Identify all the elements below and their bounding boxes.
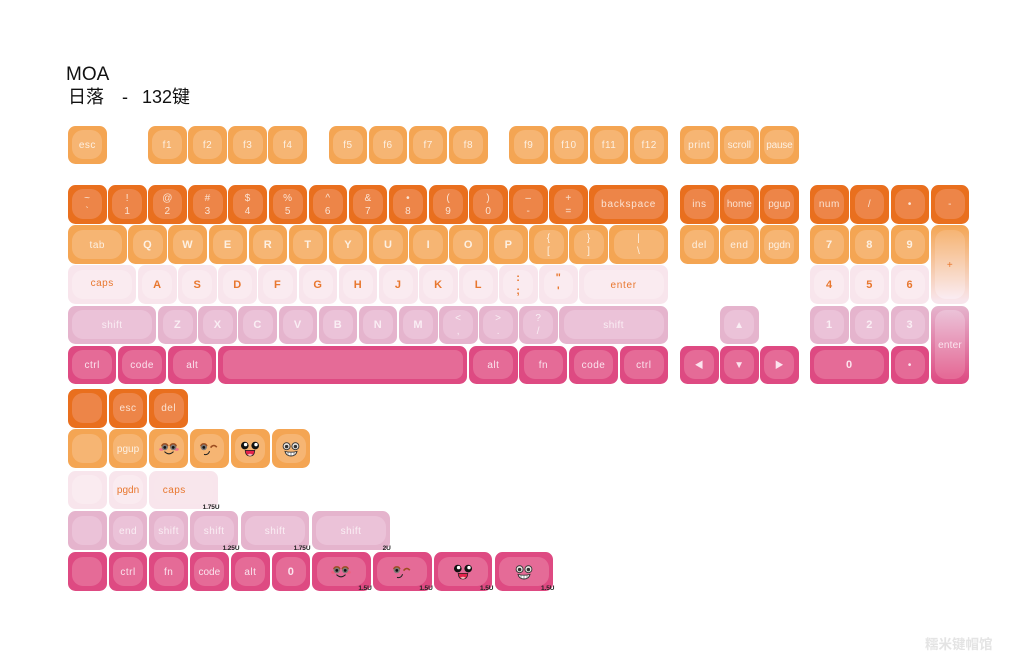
key: shift 1U xyxy=(149,511,188,550)
key: C: C xyxy=(253,319,262,331)
key: O xyxy=(449,225,488,264)
key: B xyxy=(319,306,357,344)
key: f11 xyxy=(590,126,628,164)
key: 0: 0 xyxy=(485,206,491,217)
key: alt alternate: alt xyxy=(244,567,256,578)
key: 9: 9 xyxy=(445,206,451,217)
key: code alternate xyxy=(190,552,229,591)
title xyxy=(66,64,190,107)
key: open mouth face 1.5U xyxy=(434,552,492,591)
key: equals: = xyxy=(565,206,572,217)
title: product name: MOA xyxy=(66,64,109,85)
key: arrow right: ▶ xyxy=(775,360,784,370)
key: shift 1.25U xyxy=(190,511,238,550)
key: minus: - xyxy=(527,206,530,217)
key: f10 xyxy=(550,126,588,164)
key: left alt xyxy=(168,346,216,384)
key: W xyxy=(168,225,207,264)
key: scroll xyxy=(720,126,759,164)
key: f9: f9 xyxy=(524,140,533,151)
size label: 1.5U: 1.5U xyxy=(358,585,372,592)
key: semicolon: ; xyxy=(516,285,520,297)
key: pause: pause xyxy=(766,140,792,151)
key: period xyxy=(479,306,518,344)
key: pad 3 xyxy=(890,306,929,344)
key: f2: f2 xyxy=(203,140,212,151)
key: f1 xyxy=(148,126,187,164)
key: L: L xyxy=(475,279,482,291)
key: pad 4 xyxy=(810,265,849,304)
key: f5 xyxy=(328,126,367,164)
key: num: num xyxy=(819,199,840,210)
key: pad 5: 5 xyxy=(866,279,873,291)
key: arrow down: ▼ xyxy=(734,360,745,371)
key: 5: % xyxy=(283,193,293,204)
main block: caps row xyxy=(68,265,668,304)
key: caps 1.75U xyxy=(149,471,218,509)
key: ins: ins xyxy=(692,199,706,210)
key: M xyxy=(399,306,438,344)
key: f4 xyxy=(268,126,307,164)
key: period: . xyxy=(497,326,500,337)
key: 1: 1 xyxy=(124,206,130,217)
key: del alternate xyxy=(149,389,188,428)
key: backspace xyxy=(589,185,668,224)
main block: shift row xyxy=(68,306,668,344)
key: B: B xyxy=(334,319,342,331)
key: 3: # xyxy=(205,193,211,204)
key: esc alternate xyxy=(109,389,147,428)
key: left bracket: { xyxy=(547,233,551,244)
key: pad 7: 7 xyxy=(826,239,833,251)
key: Y: Y xyxy=(344,239,352,251)
key: X: X xyxy=(214,319,222,331)
key: blank mauve xyxy=(68,511,107,550)
key: equals: + xyxy=(565,193,572,204)
key: left bracket: [ xyxy=(547,246,550,257)
key: backslash xyxy=(609,225,668,264)
key: f9 xyxy=(509,126,548,164)
key: 3: 3 xyxy=(205,206,211,217)
key: blank light pink xyxy=(68,471,107,509)
extras: light pink row xyxy=(68,471,220,511)
key: shift 2U xyxy=(312,511,390,550)
key: right alt xyxy=(469,346,518,384)
watermark: 糯米键帽馆 xyxy=(925,637,992,652)
key: right bracket: ] xyxy=(587,246,590,257)
key: D xyxy=(218,265,257,304)
key: right bracket: } xyxy=(587,233,591,244)
key: P: P xyxy=(505,239,512,251)
key: subtract: - xyxy=(948,199,952,210)
title: colourway and key count: 132键 xyxy=(142,87,190,107)
key: f6: f6 xyxy=(383,140,393,151)
key: del: del xyxy=(692,240,707,251)
key: pad 9: 9 xyxy=(907,239,913,251)
key: right code: code xyxy=(582,360,605,371)
key: quote: ' xyxy=(557,285,560,297)
key: alt alternate xyxy=(231,552,270,591)
key: f12: f12 xyxy=(641,140,657,151)
key: f8: f8 xyxy=(464,140,473,151)
key: T xyxy=(289,225,327,264)
key: Z xyxy=(158,306,197,344)
navigation cluster xyxy=(680,185,799,384)
extras: mauve row xyxy=(68,511,391,552)
key: ctrl alternate: ctrl xyxy=(120,567,136,578)
key: code alternate: code xyxy=(198,567,220,578)
key: A: A xyxy=(153,279,162,291)
key: esc alternate: esc xyxy=(120,403,137,414)
key: blank dark orange xyxy=(68,389,107,428)
key: smiling face 1.5U xyxy=(312,552,371,591)
main block: number row xyxy=(68,185,668,224)
key: caps: caps xyxy=(91,278,114,289)
key: E xyxy=(208,225,247,264)
key: f12 xyxy=(630,126,668,164)
key: subtract xyxy=(931,185,969,224)
key: 5 xyxy=(268,185,307,224)
key: 6: 6 xyxy=(325,206,331,217)
key: 7: & xyxy=(364,193,372,204)
key: semicolon: : xyxy=(516,272,520,284)
key: 8: • xyxy=(406,193,410,204)
key: del xyxy=(680,225,719,264)
key: 0 alternate xyxy=(272,552,310,591)
key: fn xyxy=(519,346,567,384)
extras: orange row with faces xyxy=(68,429,310,468)
main block: tab row xyxy=(68,225,668,264)
key: fn alternate xyxy=(149,552,188,591)
key: pad 6: 6 xyxy=(907,279,913,291)
key: 0 xyxy=(469,185,508,224)
key: H xyxy=(339,265,377,304)
key: f4: f4 xyxy=(283,140,292,151)
key: N: N xyxy=(374,319,382,331)
key: K: K xyxy=(434,279,443,291)
key: tilde: ~ xyxy=(84,193,91,204)
key: pad dot: • xyxy=(908,360,912,371)
key: slash: / xyxy=(537,326,540,337)
key: 9 xyxy=(429,185,468,224)
main block: bottom row xyxy=(68,346,668,384)
key: 4: $ xyxy=(245,193,251,204)
key: pad 1 xyxy=(810,306,849,344)
key: pgdn: pgdn xyxy=(768,240,790,251)
key: f7 xyxy=(409,126,447,164)
key: H: H xyxy=(354,279,362,291)
key: ins xyxy=(680,185,719,224)
key: f10: f10 xyxy=(561,140,577,151)
key: 6 xyxy=(309,185,347,224)
key: A xyxy=(138,265,177,304)
key: left alt: alt xyxy=(186,360,198,371)
key: enter xyxy=(579,265,668,304)
key: f3: f3 xyxy=(243,140,252,151)
key: caps xyxy=(68,265,136,304)
key: home: home xyxy=(727,199,752,210)
key: f7: f7 xyxy=(423,140,433,151)
key: pad 2: 2 xyxy=(866,319,873,331)
key: pad 5 xyxy=(850,265,889,304)
key: esc xyxy=(68,126,107,164)
extras: pink row with wide faces xyxy=(68,552,554,592)
key: pad enter: enter xyxy=(938,340,962,351)
key: arrow down xyxy=(720,346,759,384)
key: Q xyxy=(128,225,167,264)
key: 1: ! xyxy=(126,193,129,204)
key: F xyxy=(258,265,297,304)
key: num xyxy=(810,185,849,224)
key: R xyxy=(249,225,287,264)
key: semicolon xyxy=(499,265,538,304)
key: minus: – xyxy=(525,193,531,204)
key: D: D xyxy=(233,279,242,291)
key: X xyxy=(198,306,237,344)
key: C xyxy=(238,306,277,344)
key: enter: enter xyxy=(610,280,637,291)
key: quote: " xyxy=(556,272,561,284)
key: pad 0: 0 xyxy=(846,359,853,371)
key: scroll: scroll xyxy=(728,140,751,151)
key: toothy grin face 1.5U xyxy=(495,552,553,591)
key: slash: ? xyxy=(535,313,541,324)
key: left shift: shift xyxy=(102,320,123,331)
key: right bracket xyxy=(569,225,608,264)
key: 2 xyxy=(148,185,187,224)
key: ctrl alternate xyxy=(109,552,147,591)
key: left ctrl: ctrl xyxy=(84,360,100,371)
key: winking face xyxy=(190,429,229,468)
key: V xyxy=(278,306,317,344)
key: open mouth face xyxy=(231,429,270,468)
key: pgup alternate: pgup xyxy=(117,444,139,455)
key: 0 alternate: 0 xyxy=(288,566,294,578)
key: f11: f11 xyxy=(602,140,616,151)
key: W: W xyxy=(182,239,193,251)
key: left shift xyxy=(68,306,156,344)
key: shift 1U: shift xyxy=(158,526,179,537)
key: pad 8 xyxy=(850,225,889,264)
key: home xyxy=(720,185,759,224)
key: print xyxy=(680,126,718,164)
key: comma: , xyxy=(457,326,460,337)
key: right ctrl: ctrl xyxy=(636,360,652,371)
key: fn alternate: fn xyxy=(164,567,173,578)
key: 1 xyxy=(108,185,147,224)
key: V: V xyxy=(294,319,302,331)
key: pad 3: 3 xyxy=(907,319,913,331)
size label: 1.75U: 1.75U xyxy=(203,504,219,511)
key: multiply xyxy=(890,185,929,224)
key: 5: 5 xyxy=(285,206,291,217)
key: U xyxy=(369,225,408,264)
key: quote xyxy=(539,265,578,304)
key: G xyxy=(298,265,337,304)
key: 4 xyxy=(228,185,267,224)
key: f8 xyxy=(449,126,488,164)
key: end alternate xyxy=(109,511,147,550)
key: divide xyxy=(850,185,889,224)
key: f3 xyxy=(228,126,267,164)
title: colourway and key count xyxy=(68,87,190,107)
key: arrow up: ▲ xyxy=(734,320,745,331)
key: P xyxy=(489,225,528,264)
size label: 1.5U: 1.5U xyxy=(480,585,493,592)
size label: 1.75U: 1.75U xyxy=(294,545,310,552)
key: caps 1.75U: caps xyxy=(163,485,186,496)
key: L xyxy=(459,265,498,304)
key: I: I xyxy=(427,239,430,251)
key: arrow left xyxy=(680,346,719,384)
key: f6 xyxy=(369,126,407,164)
key: Z: Z xyxy=(174,319,181,331)
title: colourway and key count: 日落 xyxy=(68,87,104,107)
key: right shift: shift xyxy=(603,320,624,331)
function row xyxy=(68,126,799,164)
key: pgdn xyxy=(760,225,799,264)
key: K xyxy=(419,265,458,304)
key: shift 1.75U xyxy=(241,511,309,550)
key: pad 8: 8 xyxy=(866,239,873,251)
key: I xyxy=(409,225,448,264)
key: R: R xyxy=(264,239,272,251)
key: 8 xyxy=(389,185,427,224)
key: spacebar xyxy=(218,346,467,384)
key: pad 1: 1 xyxy=(826,319,833,331)
key: F: F xyxy=(274,279,281,291)
key: right shift xyxy=(559,306,668,344)
key: pgdn alternate: pgdn xyxy=(117,485,139,496)
key: pad 0 xyxy=(810,346,889,384)
key: U: U xyxy=(384,239,392,251)
key: comma: < xyxy=(455,313,462,324)
key: T: T xyxy=(304,239,312,251)
key: slash xyxy=(519,306,558,344)
key: blank pink xyxy=(68,552,107,591)
key: comma xyxy=(439,306,478,344)
key: 2: 2 xyxy=(164,206,171,217)
key: tab: tab xyxy=(90,240,105,251)
key: toothy grin face xyxy=(272,429,310,468)
key: 7 xyxy=(349,185,387,224)
size label: 1.5U: 1.5U xyxy=(419,585,433,592)
key: 0: ) xyxy=(486,193,490,204)
key: Y xyxy=(329,225,367,264)
key: O: O xyxy=(464,239,473,251)
key: print: print xyxy=(688,140,710,151)
key: arrow left: ◀ xyxy=(695,360,704,370)
size label: 2U: 2U xyxy=(383,545,391,552)
key: blank orange xyxy=(68,429,107,468)
key: pad enter xyxy=(931,306,969,384)
key: backslash: \ xyxy=(637,246,640,257)
key: backslash: | xyxy=(637,233,640,244)
key: 7: 7 xyxy=(365,206,371,217)
key: period: > xyxy=(495,313,502,324)
key: pgup: pgup xyxy=(768,199,790,210)
key: left ctrl xyxy=(68,346,116,384)
key: N xyxy=(359,306,397,344)
key: pgdn alternate xyxy=(109,471,147,509)
key: left code: code xyxy=(130,360,154,371)
key: smiling face xyxy=(149,429,188,468)
key: esc: esc xyxy=(79,140,96,151)
key: f5: f5 xyxy=(343,140,353,151)
key: equals xyxy=(549,185,588,224)
key: end: end xyxy=(730,240,748,251)
key: left bracket xyxy=(529,225,568,264)
key: Q: Q xyxy=(143,239,152,251)
key: del alternate: del xyxy=(161,403,176,414)
key: pgup xyxy=(760,185,799,224)
key: pad plus xyxy=(931,225,969,304)
key: winking face 1.5U xyxy=(373,552,432,591)
key: divide: / xyxy=(868,199,871,210)
key: multiply: • xyxy=(908,199,912,210)
key: pad 2 xyxy=(850,306,889,344)
key: S: S xyxy=(194,279,201,291)
key: pad 9 xyxy=(890,225,929,264)
key: pad 7 xyxy=(810,225,849,264)
key: tilde xyxy=(68,185,107,224)
key: arrow up xyxy=(720,306,759,344)
key: 4: 4 xyxy=(245,206,251,217)
size label: 1.5U: 1.5U xyxy=(541,585,554,592)
key: pgup alternate xyxy=(109,429,147,468)
size label: 1.25U: 1.25U xyxy=(223,545,239,552)
key: end alternate: end xyxy=(119,526,137,537)
key: arrow right xyxy=(760,346,799,384)
extras: dark orange row xyxy=(68,389,188,428)
key: S xyxy=(178,265,217,304)
key: left code xyxy=(118,346,166,384)
key: end xyxy=(720,225,759,264)
key: tilde: ` xyxy=(85,206,89,217)
key: 8: 8 xyxy=(405,206,411,217)
title: colourway and key count: - xyxy=(122,87,128,107)
key: M: M xyxy=(413,319,423,331)
key: 3 xyxy=(188,185,227,224)
key: shift 1.75U: shift xyxy=(265,526,286,537)
key: fn: fn xyxy=(539,360,548,371)
key: right code xyxy=(569,346,618,384)
key: pause xyxy=(760,126,799,164)
key: J: J xyxy=(395,279,402,291)
key: minus xyxy=(509,185,548,224)
key: pad dot xyxy=(890,346,929,384)
key: right ctrl xyxy=(620,346,668,384)
key: f2 xyxy=(188,126,227,164)
key: tab xyxy=(68,225,126,264)
key: 9: ( xyxy=(446,193,450,204)
key: G: G xyxy=(313,279,322,291)
key: backspace: backspace xyxy=(601,199,656,210)
key: pad 6 xyxy=(890,265,929,304)
key: shift 2U: shift xyxy=(341,526,361,537)
key: 2: @ xyxy=(162,193,173,204)
key: J xyxy=(379,265,418,304)
numeric keypad xyxy=(810,185,969,384)
key: f1: f1 xyxy=(163,140,172,151)
key: shift 1.25U: shift xyxy=(204,526,225,537)
key: pad plus: + xyxy=(947,260,953,271)
key: E: E xyxy=(224,239,232,251)
key: right alt: alt xyxy=(487,360,499,371)
key: 6: ^ xyxy=(325,193,331,204)
key: pad 4: 4 xyxy=(826,279,833,291)
